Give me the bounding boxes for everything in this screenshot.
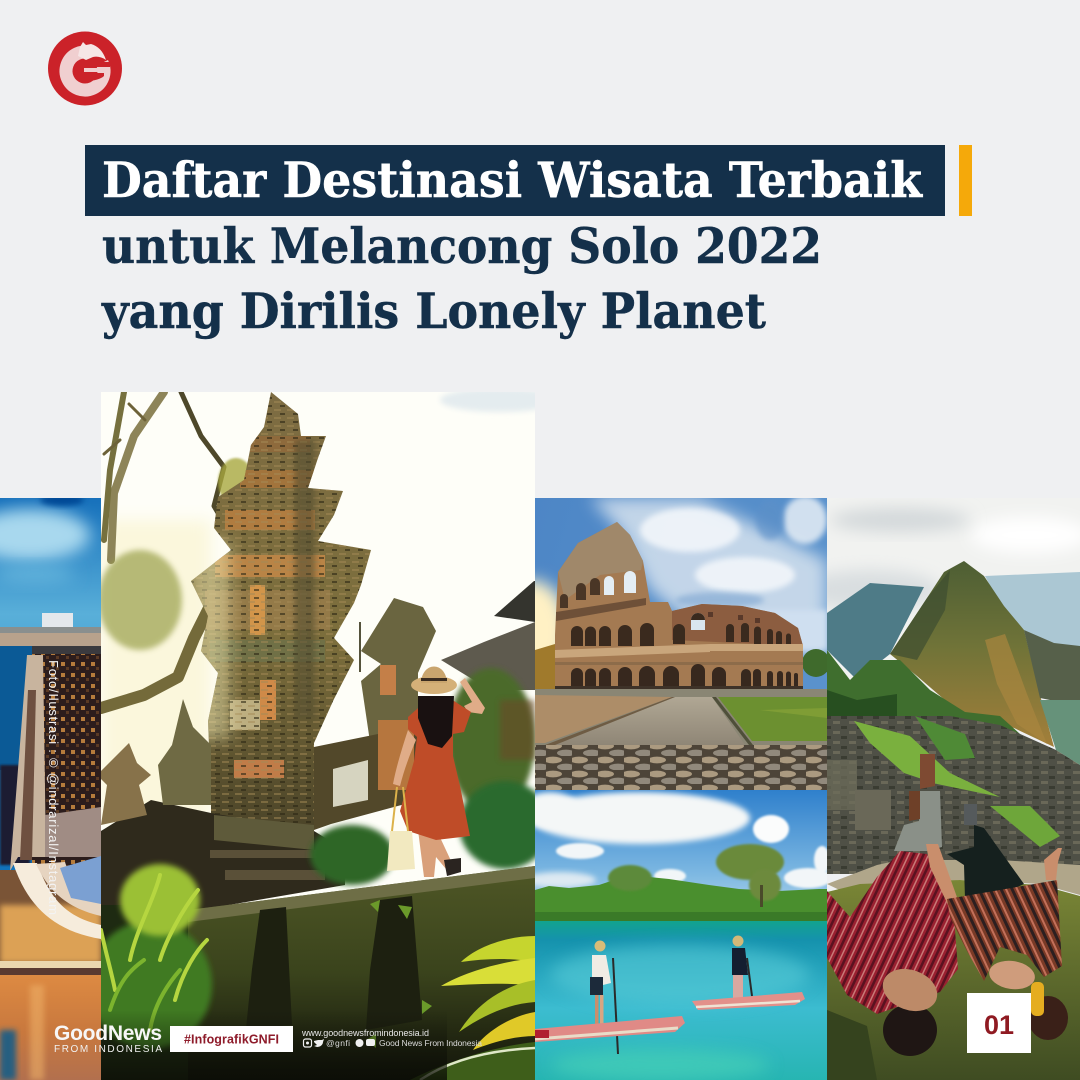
- title line 1: Daftar Destinasi Wisata Terbaik: [102, 151, 923, 209]
- paddler right: [732, 936, 752, 999]
- tower: [32, 646, 101, 871]
- skypark platform: [42, 613, 73, 627]
- arches lower tier: [571, 664, 798, 686]
- palms: [608, 865, 652, 891]
- man legs with boots: [894, 754, 942, 851]
- clouds: [590, 498, 827, 660]
- lower city glow: [0, 870, 101, 970]
- photo: Machu Picchu: [800, 498, 1080, 1080]
- social icons and handles: Good News From Indonesia: [379, 1038, 482, 1048]
- hair: [418, 696, 454, 748]
- man patterned shirt: [827, 851, 958, 1014]
- grassy ground shadow: [827, 1010, 877, 1080]
- colosseum body: [555, 522, 803, 690]
- small leaf sprigs: [366, 900, 432, 1048]
- ArtScience museum petals: [13, 863, 101, 939]
- right cliff: [1024, 630, 1080, 706]
- water: [0, 975, 101, 1080]
- cobblestones: [535, 745, 827, 790]
- arm woman pointing: [1044, 848, 1062, 880]
- title line 2: untuk Melancong Solo 2022: [102, 217, 822, 275]
- small pagodas: [97, 743, 151, 825]
- trees: [535, 644, 555, 690]
- title highlight bar: [85, 145, 945, 216]
- temple tower: [191, 392, 371, 825]
- woman yellow hat band: [1031, 982, 1044, 1016]
- foliage clumps: [98, 550, 182, 650]
- green foliage behind woman: [447, 668, 535, 812]
- dark temple base: [101, 800, 345, 912]
- page number badge: [967, 993, 1031, 1053]
- left mountain: [827, 583, 924, 680]
- footer branding: [54, 1022, 482, 1055]
- hashtag badge: [170, 1026, 293, 1052]
- photo: Colosseum Rome: [535, 498, 827, 790]
- man's hand on shoulder: [926, 844, 958, 905]
- wall: [188, 866, 535, 1080]
- tree line: [535, 875, 827, 923]
- water: [535, 921, 827, 1080]
- photo credit: Foto/Ilustrasi : © @indrarizal/Instagram: [46, 660, 61, 915]
- arches upper tier: [560, 578, 600, 608]
- paddler left: [590, 940, 618, 1054]
- tree branches: [101, 392, 238, 708]
- title: [85, 145, 972, 340]
- Huayna Picchu peak: [890, 561, 1054, 747]
- tote bag: [387, 831, 415, 871]
- photo: Singapore Marina Bay Sands: [0, 494, 101, 1080]
- social icons and handles: [304, 1038, 482, 1048]
- arches middle tier: [571, 623, 791, 646]
- arms: [393, 730, 416, 786]
- woman legs: [947, 804, 1024, 902]
- clouds: [800, 570, 940, 610]
- left dirt paving: [535, 695, 672, 743]
- green plants bottom-left: [88, 921, 212, 1049]
- thatched roofs: [441, 622, 535, 690]
- accent orange bar: [959, 145, 972, 216]
- left hills: [827, 650, 1060, 770]
- logo: GNFI red circle emblem: [48, 32, 122, 106]
- terrace lawn: [854, 721, 1000, 797]
- woman patterned shirt: [947, 880, 1062, 981]
- from indonesia: FROM INDONESIA: [54, 1044, 162, 1055]
- GoodNews wordmark: GoodNews: [54, 1022, 162, 1045]
- dark backing under plants: [101, 905, 191, 1080]
- yellow leaves bottom right: [410, 936, 535, 1080]
- board right: [692, 992, 805, 1010]
- hat: [411, 676, 457, 694]
- photo: paddleboarding lagoon: [520, 790, 832, 1080]
- secondary shrine: [361, 598, 436, 736]
- road: [548, 697, 745, 745]
- woman face: [987, 958, 1037, 992]
- board left: [535, 1016, 685, 1042]
- photo: Bali temple and woman in red dress: [88, 388, 560, 1080]
- ground strip: [535, 689, 827, 745]
- grass: [718, 697, 827, 741]
- website: www.goodnewsfromindonesia.id: [301, 1028, 429, 1038]
- dress: [400, 701, 471, 840]
- footer dark gradient: [101, 1010, 447, 1080]
- man face and hair: [883, 1004, 937, 1056]
- woman hair: [1028, 996, 1068, 1040]
- sun glow: [535, 568, 558, 650]
- grass: [827, 880, 1080, 1080]
- page number badge: 01: [984, 1010, 1014, 1040]
- legs: [418, 834, 450, 877]
- social icons and handles: @gnfi: [326, 1038, 350, 1048]
- courtyard wall and window: [314, 734, 417, 830]
- woman: [387, 666, 485, 877]
- clouds: [530, 792, 750, 844]
- ruins band: [827, 716, 1080, 874]
- distant right sky: [985, 572, 1080, 650]
- title line 3: yang Dirilis Lonely Planet: [101, 282, 766, 340]
- ledge: [827, 860, 1080, 895]
- Bali sky: [101, 392, 535, 904]
- hashtag badge: #InfografikGNFI: [184, 1032, 279, 1046]
